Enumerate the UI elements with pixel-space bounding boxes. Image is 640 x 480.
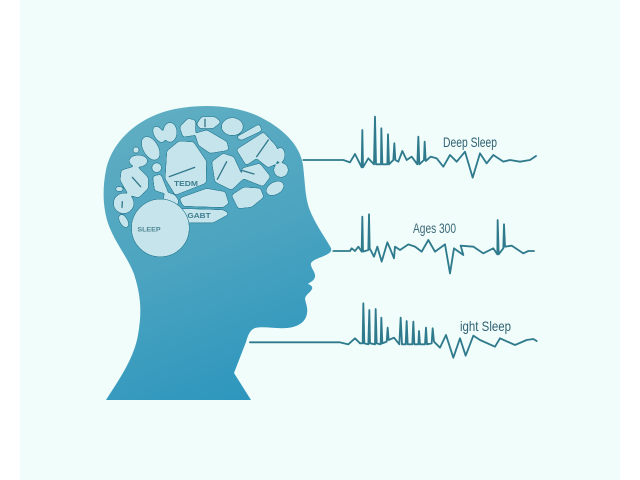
brain [115,118,287,255]
waveform: deep sleep [303,117,536,178]
label: deep sleep: Deep Sleep [443,134,497,150]
label: light sleep: ight Sleep [460,318,511,334]
large brain lobe [133,201,188,255]
label: ages 300: Ages 300 [413,220,456,236]
brain label: center lobe: TEDM [174,179,198,188]
brain fold marks [122,119,268,207]
brain label: large lobe: SLEEP [137,226,161,233]
brain lobes [115,118,287,227]
head silhouette [104,106,331,400]
brain label: lower lobe: GABT [187,211,211,220]
waveform: light sleep [250,303,537,358]
waveform: ages 300 [333,214,534,273]
